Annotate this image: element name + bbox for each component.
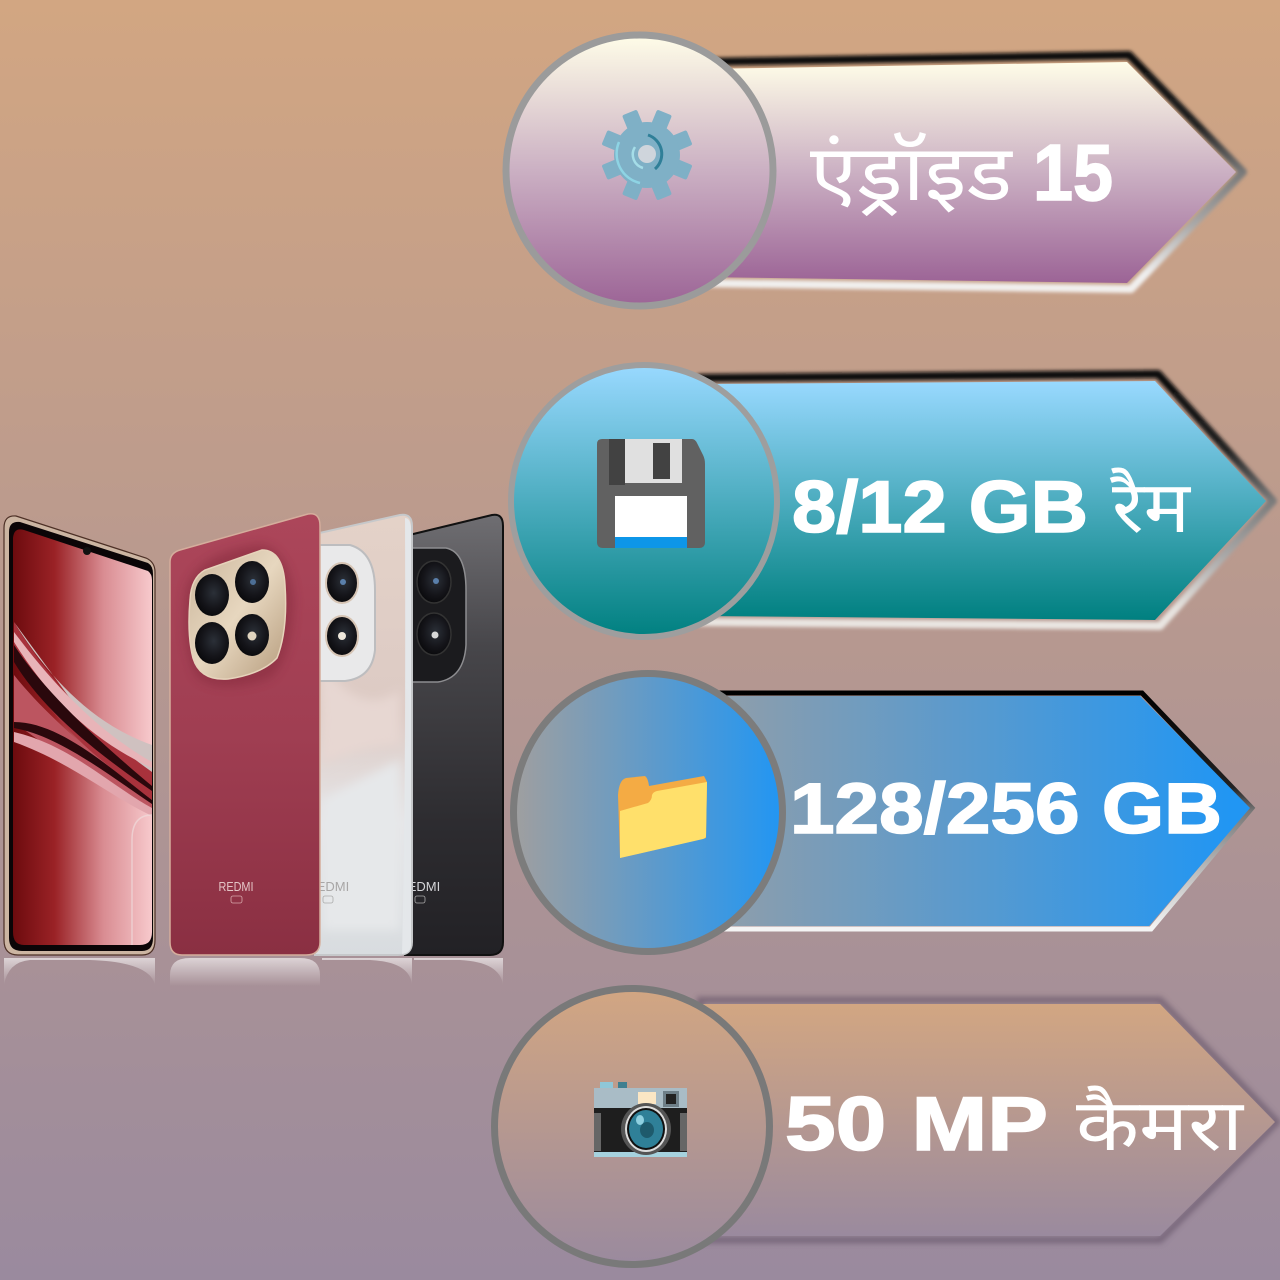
panel: android: [506, 35, 1243, 306]
label: ram: [792, 467, 1192, 548]
arrow shadow: [700, 55, 1243, 289]
phone reflections: [4, 958, 503, 986]
arrow shadow: [700, 374, 1273, 626]
label: camera: 50 MP: [785, 1082, 1048, 1167]
icon: gear: [601, 109, 693, 201]
red phone back: [170, 514, 320, 955]
label: ram: रैम: [1110, 467, 1192, 548]
label: android 15: [810, 128, 1113, 217]
black phone back: [405, 515, 503, 955]
label: ram: 8/12 GB: [792, 467, 1088, 548]
circle: [494, 988, 770, 1264]
icon: camera: [594, 1082, 687, 1157]
red phone back: REDMI: [218, 879, 254, 894]
label: camera: [785, 1082, 1245, 1167]
arrow shadows: [700, 1000, 1277, 1278]
white phone back: EDMI: [317, 879, 349, 894]
black phone back: EDMI: [408, 879, 440, 894]
icon: folder: [618, 776, 707, 858]
label: storage: 128/256 GB: [790, 770, 1222, 849]
front phone: [4, 516, 155, 955]
label: android 15: एंड्रॉइड: [810, 129, 1013, 217]
circle: [514, 674, 782, 952]
label: android 15: 15: [1033, 128, 1113, 217]
panel: storage: [514, 674, 1252, 952]
arrow edge: [700, 693, 1252, 929]
arrow: [700, 696, 1250, 926]
icon: floppy disk: [597, 439, 705, 548]
panel: camera: [494, 988, 1277, 1278]
panel: ram: [511, 365, 1273, 637]
panel: phones: [4, 514, 503, 986]
arrow: [700, 62, 1236, 283]
arrow: [700, 1004, 1275, 1236]
circle: [506, 35, 773, 306]
white phone back: [315, 515, 412, 955]
circle: [511, 365, 777, 637]
arrow: [700, 381, 1266, 620]
label: camera: कैमरा: [1076, 1085, 1245, 1166]
